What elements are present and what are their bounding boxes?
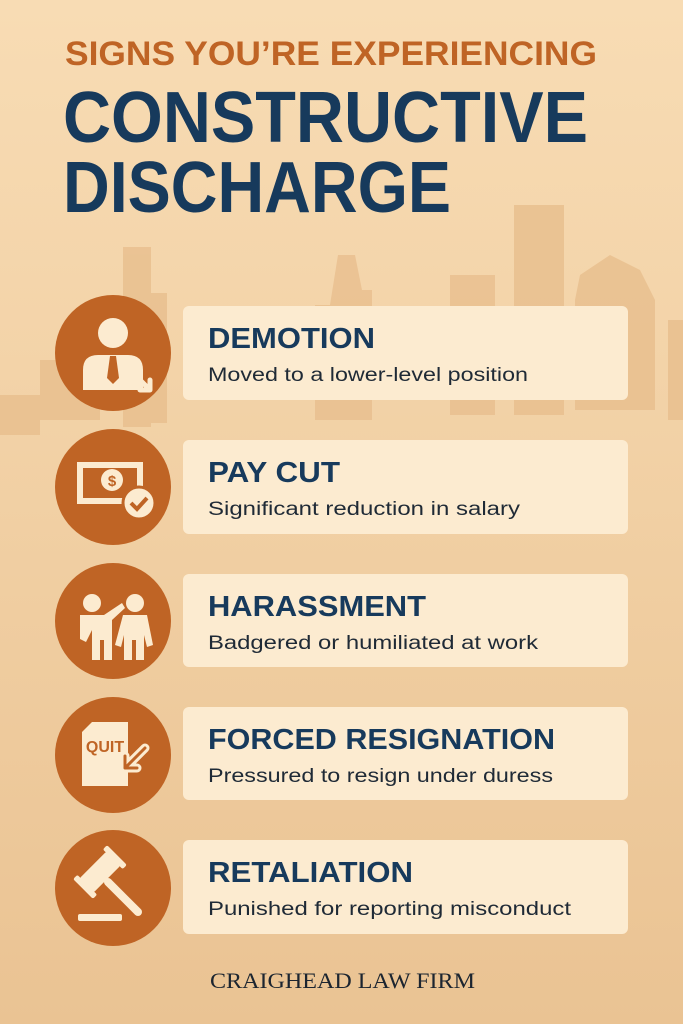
item: pay cut: Significant reduction in salary <box>208 499 521 520</box>
icon: quit letter: QUIT <box>86 739 124 756</box>
skyline background <box>0 205 683 435</box>
icon: money with check: $ <box>108 473 117 490</box>
icon: money with check <box>55 429 171 545</box>
icon: quit letter <box>55 697 171 813</box>
item: forced resignation <box>55 697 628 813</box>
title <box>63 35 597 228</box>
item: pay cut: PAY CUT <box>208 457 340 489</box>
icon: two people <box>55 563 171 679</box>
item: harassment <box>55 563 628 679</box>
item: demotion: DEMOTION <box>208 323 375 355</box>
item: demotion: Moved to a lower-level position <box>208 365 528 386</box>
icon: demoted person <box>55 295 171 411</box>
title: DISCHARGE <box>63 148 451 228</box>
item: forced resignation: FORCED RESIGNATION <box>208 724 555 756</box>
item: harassment: Badgered or humiliated at work <box>208 633 539 654</box>
title: SIGNS YOU’RE EXPERIENCING <box>65 35 597 73</box>
title: CONSTRUCTIVE <box>63 78 588 158</box>
item: forced resignation: Pressured to resign under duress <box>208 766 553 787</box>
item: harassment: HARASSMENT <box>208 591 426 623</box>
footer: firm name: CRAIGHEAD LAW FIRM <box>210 968 475 993</box>
item: pay cut <box>55 429 628 545</box>
item: retaliation <box>55 830 628 946</box>
item: demotion <box>55 295 628 411</box>
icon: gavel <box>55 830 171 946</box>
item: retaliation: RETALIATION <box>208 857 413 889</box>
item: retaliation: Punished for reporting misconduct <box>208 899 572 920</box>
